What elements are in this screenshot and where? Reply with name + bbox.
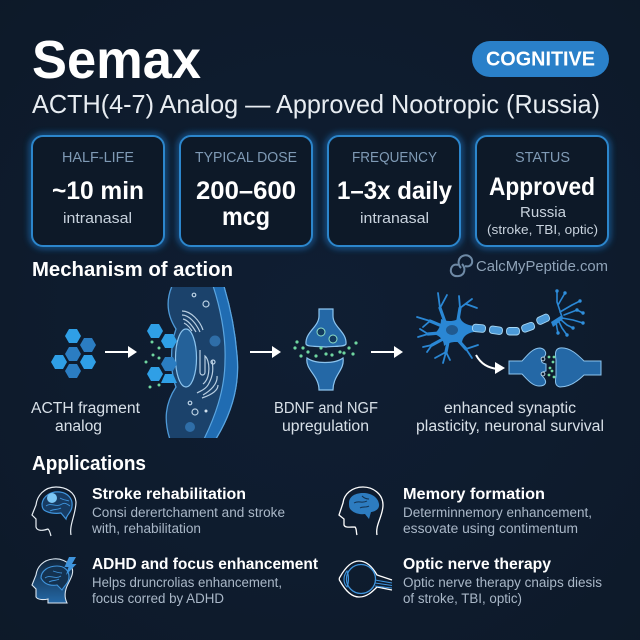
panel: status: STATUS [515,150,570,166]
caption: ACTH fragment analog [31,400,141,435]
badge: cognitive: COGNITIVE [486,48,595,70]
panel: half-life: HALF-LIFE [62,150,134,166]
text: memory formation: Memory formation [403,486,545,503]
text: memory formation: essovate using contimentum [403,521,578,536]
icon: bound hexagons and green particles [144,324,177,388]
subtitle: ACTH(4-7) Analog — Approved Nootropic (Russia) [32,89,600,119]
heading: mechanism of action: Mechanism of action [32,259,233,281]
panel: typical dose: mcg [222,203,270,231]
text: ADHD and focus enhancement: focus corred by ADHD [92,591,224,606]
panel: half-life: intranasal [63,210,132,227]
caption: BDNF and NGF upregulation [274,400,378,435]
badge: cognitive [472,41,609,77]
caption: enhanced synaptic plasticity: plasticity, neuronal survival [416,418,604,435]
caption: enhanced synaptic plasticity [416,400,604,435]
text: stroke rehabilitation: Consi derertchament and stroke [92,505,285,520]
brand: calcmypeptide: CalcMyPeptide.com [476,259,608,275]
icon: peptide hexagons [51,329,96,378]
panel: status: Russia [520,204,567,221]
caption: enhanced synaptic plasticity: enhanced synaptic [444,400,576,417]
text: memory formation: Determinnemory enhancement, [403,505,592,520]
illustration: enhanced synapse [509,348,601,387]
caption: BDNF and NGF upregulation: BDNF and NGF [274,400,378,417]
panel: status: Approved [489,173,595,201]
icon: head with brain, lightning [32,557,76,603]
text: stroke rehabilitation: with, rehabilitation [91,521,201,536]
panel: frequency: FREQUENCY [352,150,437,166]
text: optic nerve therapy: of stroke, TBI, optic) [403,591,522,606]
illustration: neuron [417,289,585,363]
text: optic nerve therapy: Optic nerve therapy cnaips diesis [403,575,602,590]
text: ADHD and focus enhancement [92,556,319,606]
icon: head with brain, memory [339,487,383,535]
text: ADHD and focus enhancement: ADHD and focus enhancement [92,556,319,573]
arrow: synapse to neuron [371,346,403,358]
text: optic nerve therapy: Optic nerve therapy [403,556,551,573]
illustration: synapse with BDNF and NGF [293,309,358,390]
caption: BDNF and NGF upregulation: upregulation [282,418,369,435]
title: Semax [32,30,201,90]
text: stroke rehabilitation [91,486,285,536]
arrow: neuron to enhanced synapse [476,355,505,374]
text: stroke rehabilitation: Stroke rehabilitation [92,486,246,503]
panel: frequency: intranasal [360,210,429,227]
icon: chain link logo [451,255,472,276]
icon: head with brain, stroke [32,487,76,536]
heading: applications: Applications [32,453,146,475]
illustration: cell with receptors [166,280,238,445]
icon: eye with optic nerve [339,561,392,597]
panel: typical dose: TYPICAL DOSE [195,150,297,166]
panel: half-life [32,136,164,246]
panel: frequency [328,136,460,246]
text: ADHD and focus enhancement: Helps druncrolias enhancement, [92,575,282,590]
panel: typical dose [180,136,312,246]
text: memory formation [403,486,592,536]
panel: status [476,136,608,246]
panel: frequency: 1–3x daily [337,177,452,205]
caption: ACTH fragment analog: ACTH fragment [31,400,141,417]
panel: typical dose: 200–600 [196,177,296,205]
text: optic nerve therapy [403,556,602,606]
panel: half-life: ~10 min [52,177,144,205]
arrow: cell to synapse [250,346,281,358]
caption: ACTH fragment analog: analog [55,418,102,435]
panel: status: (stroke, TBI, optic) [487,222,598,237]
arrow: fragment to cell [105,346,137,358]
